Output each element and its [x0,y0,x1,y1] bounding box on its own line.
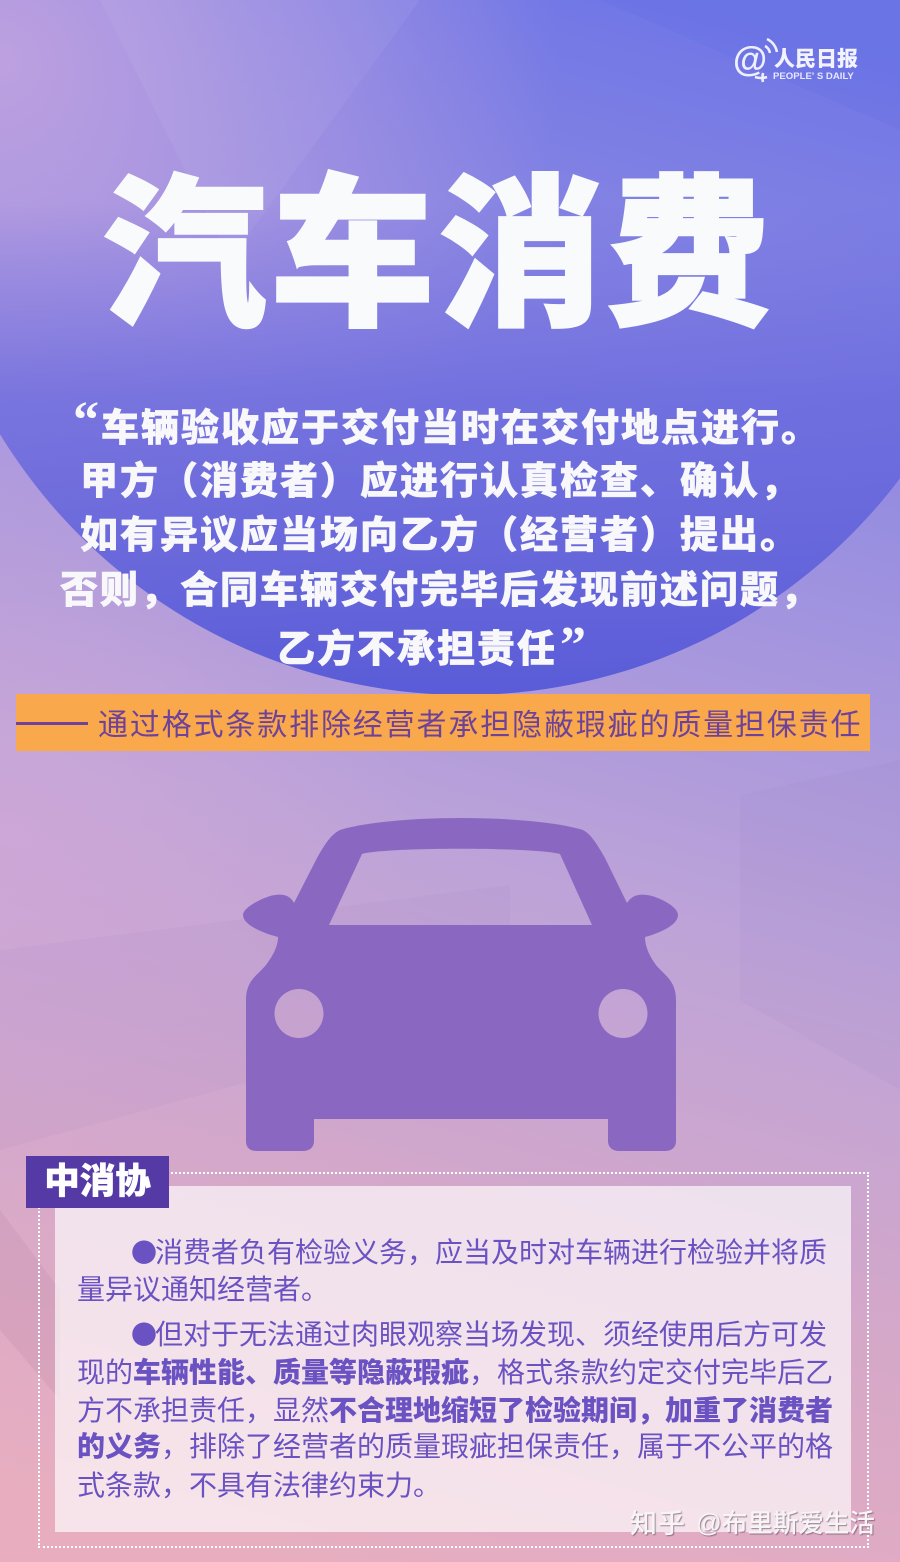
para 2 line 1: ● [131,1315,155,1352]
at sign: @ [733,40,767,79]
tag: 中消协: 中消协 [44,1161,151,1201]
para 2 line 3: 方不承担责任，显然不合理地缩短了检验期间，加重了消费者 [77,1395,833,1426]
icon: signal waves and tail [754,38,778,82]
logo: People's Daily [733,38,858,82]
quote line 1: 车辆验收应于交付当时在交付地点进行。 [101,408,821,450]
logo english: PEOPLE' S DAILY [773,71,854,82]
para 2 line 5: 式条款，不具有法律约束力。 [77,1470,441,1501]
subtitle text: 通过格式条款排除经营者承担隐蔽瑕疵的质量担保责任 [98,709,862,742]
watermark: @布里斯爱生活 [696,1510,875,1538]
quote line 3: 如有异议应当场向乙方（经营者）提出。 [80,515,800,557]
para 2 line 2: 现的车辆性能、质量等隐蔽瑕疵，格式条款约定交付完毕后乙 [77,1357,833,1388]
dash [16,722,88,725]
quote line 2: 甲方（消费者）应进行认真检查、确认， [80,461,800,503]
dotted frame [38,1172,869,1548]
para 1 line 1: ● [131,1233,155,1270]
quote block [60,392,821,674]
quote line 5: 乙方不承担责任 [277,629,557,671]
tag: 中消协 [26,1156,169,1208]
para 1 line 1: 消费者负有检验义务，应当及时对车辆进行检验并将质 [155,1237,827,1268]
quote line 4: 否则，合同车辆交付完毕后发现前述问题， [60,570,820,612]
closing quote mark: ” [560,617,586,674]
panel: consumer association text [55,1186,851,1532]
icon: car [243,818,678,1151]
para 2 line 4: 的义务，排除了经营者的质量瑕疵担保责任，属于不公平的格 [77,1431,833,1462]
subtitle bar [16,694,870,751]
watermark: 知乎 [630,1509,686,1539]
title: 汽车消费 [103,164,775,347]
para 2 line 1: 但对于无法通过肉眼观察当场发现、须经使用后方可发 [155,1319,827,1350]
logo name: 人民日报 [774,48,858,71]
para 1 line 2: 量异议通知经营者。 [77,1274,329,1305]
opening quote mark: “ [73,392,99,449]
watermark [630,1509,876,1539]
